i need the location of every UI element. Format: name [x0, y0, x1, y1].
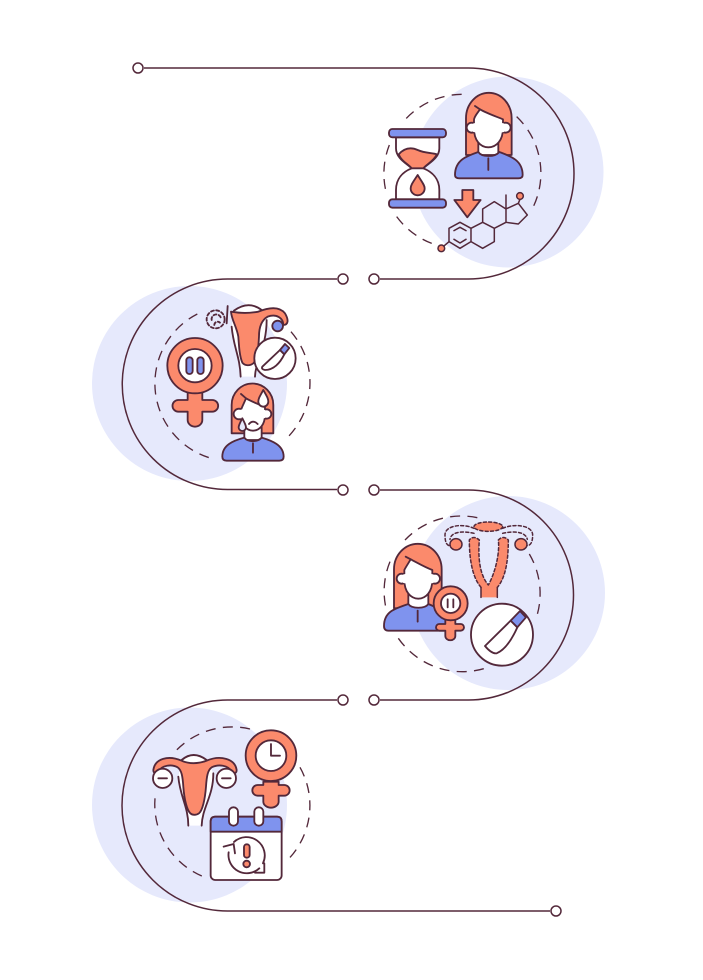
icon 1: hormone decline with time — [384, 93, 541, 252]
dashed ring 1 — [384, 94, 541, 244]
calendar — [211, 807, 282, 880]
scalpel badge — [471, 604, 533, 666]
icon 2: surgery and distress — [155, 305, 310, 461]
woman — [455, 93, 523, 178]
icon 4: cycle change — [153, 727, 310, 880]
small female symbol — [434, 586, 468, 640]
uterus — [153, 755, 237, 826]
hormone molecule — [438, 193, 527, 252]
scalpel badge — [254, 338, 296, 379]
background circle 1 — [412, 76, 604, 268]
woman with symbol — [384, 544, 448, 631]
background circle 3 — [411, 496, 605, 690]
icon 3: uterus removal — [384, 516, 540, 672]
background circle 4 — [92, 708, 287, 902]
dashed uterus outline — [445, 522, 533, 597]
background circle 2 — [92, 286, 287, 481]
uterus with removed ovary — [207, 305, 288, 377]
dashed ring 3 — [384, 516, 540, 672]
hourglass — [389, 129, 446, 208]
female symbol with pause — [167, 338, 223, 427]
crying woman — [222, 383, 284, 461]
down arrow — [454, 190, 481, 217]
dashed ring 4 — [155, 727, 310, 877]
dashed ring 2 — [155, 314, 310, 459]
timeline connector — [122, 63, 574, 916]
female symbol with clock — [246, 730, 296, 808]
